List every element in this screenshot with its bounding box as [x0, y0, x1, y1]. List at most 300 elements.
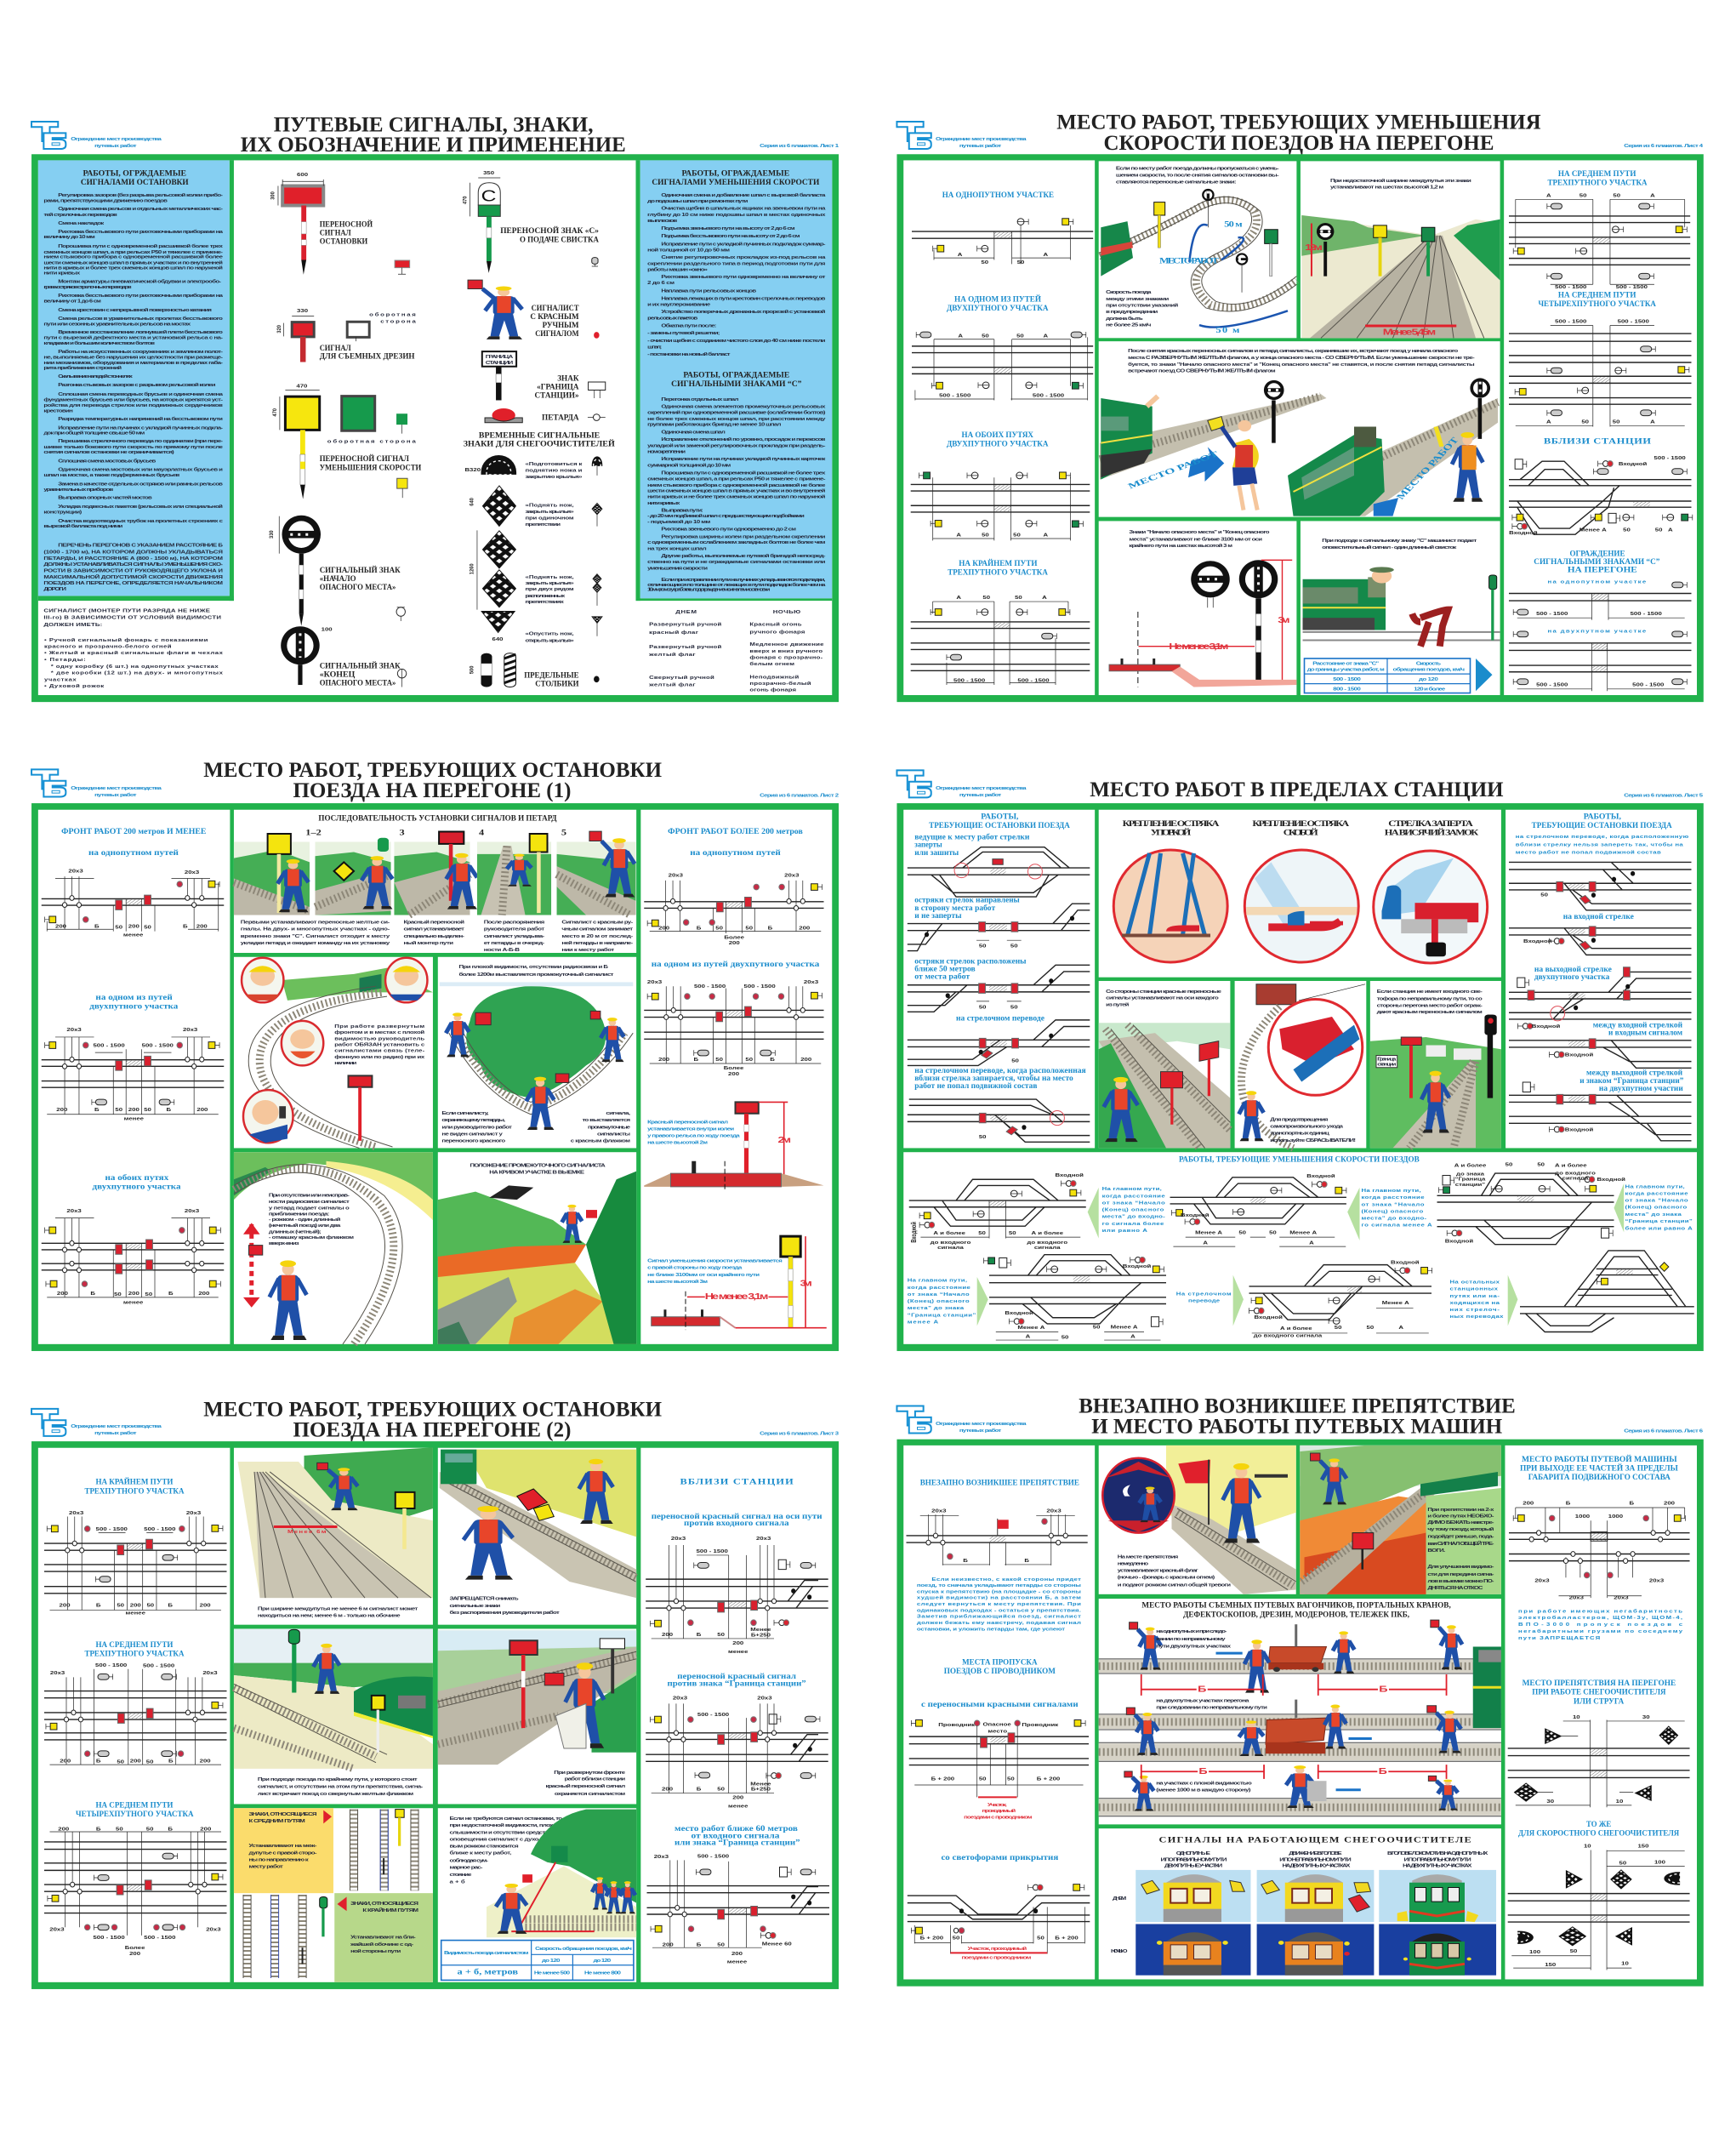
- against station limit sign: Б+250: [751, 1788, 771, 1792]
- one of two tracks diagram: А: [1043, 334, 1048, 339]
- cover signals diagram: 50: [1037, 1936, 1044, 1941]
- panel: works protected by stop signals: ройства для перевода стрелок или подвижных сердечников: [43, 402, 223, 408]
- C signs diagram: СИГНАЛЬНЫМИ ЗНАКАМИ “С”: [1534, 558, 1659, 567]
- high-speed snowplow diagram: 150: [1545, 1963, 1556, 1968]
- step 1: [234, 834, 310, 915]
- panel: works protected by stop signals: ДОРОГИ: [43, 587, 66, 592]
- one of two tracks stop diagram: 20х3: [183, 1028, 197, 1033]
- C signs diagram: НА ПЕРЕГОНЕ: [1568, 566, 1637, 574]
- diagram B: (Конец) опасного: [1361, 1209, 1423, 1214]
- diagram B: 50: [1269, 1230, 1277, 1235]
- middle of three tracks: 200: [130, 1759, 141, 1764]
- one of two tracks stop diagram: менее: [124, 1116, 144, 1121]
- obstacle diagram: [907, 1479, 1088, 1565]
- panel: signs on curve: [1099, 161, 1296, 338]
- high-speed snowplow diagram: ТО ЖЕ: [1586, 1821, 1611, 1829]
- one of two tracks long front diagram: Б: [694, 1058, 698, 1063]
- snowplow signs: закрытию крылья»: [526, 475, 583, 480]
- diagram C: станции”: [1455, 1183, 1485, 1188]
- 3 m signal placement: не ближе 3100мм от оси крайнего пути: [647, 1272, 760, 1278]
- one of two tracks long front diagram: Более: [724, 1066, 744, 1071]
- panel: snowplow signals: И ПО ПРАВИЛЬНОМУ ПУТИ: [1161, 1857, 1227, 1862]
- 3 m signal placement: [647, 1236, 827, 1330]
- diagram C: сигнала: [1562, 1177, 1589, 1181]
- panel: snowplow signals: [1099, 1828, 1501, 1979]
- panel: switch securing: КРЕПЛЕНИЕ ОСТРЯКА: [1252, 819, 1349, 828]
- panel: horn signal with table: до 120: [542, 1959, 561, 1964]
- title: И МЕСТО РАБОТЫ ПУТЕВЫХ МАШИН: [1091, 1414, 1502, 1438]
- middle of three tracks diagram: А: [1650, 193, 1655, 198]
- signalman with red flag: [468, 280, 600, 339]
- outer of three tracks diagram: 50: [1015, 596, 1022, 601]
- obstacle explanation: спуска к препятствию (на площадке - со стороны: [917, 1589, 1081, 1594]
- table: day and night signals: красный флаг: [649, 630, 698, 635]
- near station diagram: 50: [1623, 527, 1631, 533]
- panel: intermediate signalman: Если сигналисту,: [441, 1111, 489, 1115]
- logo and series label: [31, 769, 839, 798]
- scene captions: на участках с плохой видимостью: [1156, 1780, 1252, 1786]
- poster 6: sudden obstacle and track machines: [896, 1394, 1704, 1987]
- between exit switch and station limit: на двухпутном участии: [1599, 1084, 1683, 1093]
- panel: red signals on each track: [1099, 981, 1230, 1148]
- near station diagram: [1509, 437, 1693, 536]
- poster 3: stop required on a stretch (1): [31, 757, 839, 1351]
- red distance lines: [1141, 1674, 1447, 1779]
- panel: signalman equipment: • Петарды:: [44, 658, 86, 663]
- both tracks diagram: 50: [982, 533, 989, 538]
- panel: works protected by stop signals: шести смежных концов шпал в прямых участках и по внутренней: [43, 259, 223, 265]
- panel: snowplow signals: НОЧЬЮ: [1111, 1949, 1128, 1954]
- panel: whistle sign and table: Скорость: [1416, 661, 1441, 666]
- panel: works protected by stop signals: Рихтовка бесстыкового пути рихтовочными приборами на: [58, 293, 223, 299]
- panel: signs on curve: не более 25 км/ч: [1106, 322, 1151, 328]
- panel: works protected by speed reduction signals and C signs: скреплении раздельного типа в период подготовки пути для: [647, 261, 825, 266]
- panel: near station front: работ вблизи станции: [565, 1776, 625, 1782]
- near station diagram: Входной: [1619, 461, 1647, 467]
- entry switch: на входной стрелке: [1563, 912, 1634, 921]
- middle of four tracks: НА СРЕДНЕМ ПУТИ: [95, 1801, 174, 1810]
- middle of four tracks diagram: [1509, 291, 1691, 427]
- logo and series label: Серия из 6 плакатов. Лист 2: [760, 793, 839, 798]
- diagram E: 50: [1367, 1326, 1374, 1331]
- panel: red signals on each track: из путей: [1106, 1002, 1129, 1007]
- panel: works protected by stop signals: пути или сезонных уравнительных рельсов на мостах: [43, 322, 191, 327]
- against entry signal: переносной красный сигнал на оси пути: [652, 1512, 822, 1520]
- both tracks stop diagram: на обоих путях: [105, 1174, 169, 1183]
- panel: signalman equipment: III-го) В ЗАВИСИМОСТИ ОТ УСЛОВИЙ ВИДИМОСТИ: [43, 614, 221, 620]
- table: day and night signals: Красный огонь: [749, 622, 802, 627]
- panel: works protected by stop signals: ПЕРЕЧЕНЬ ПЕРЕГОНОВ С УКАЗАНИЕМ РАССТОЯНИЕ Б: [58, 543, 223, 548]
- panel: no entry signal: станции: [1377, 1062, 1396, 1067]
- panel: intermediate signalman: промежуточные: [588, 1125, 630, 1130]
- facing switches diagram: и не заперты: [914, 911, 962, 920]
- diagram C: более или равно А: [1625, 1225, 1693, 1231]
- against entry signal: менее: [728, 1650, 748, 1655]
- snowplow signs: ВРЕМЕННЫЕ СИГНАЛЬНЫЕ: [479, 431, 600, 440]
- title: МЕСТО РАБОТ, ТРЕБУЮЩИХ ОСТАНОВКИ: [203, 1397, 662, 1421]
- one of two tracks stop diagram: 20х3: [66, 1028, 82, 1033]
- diagram D: 50: [1062, 1335, 1069, 1340]
- panel: whistle sign and table: 120 и более: [1414, 687, 1445, 692]
- panel: signs on curve: МЕСТО РАБОТ: [1159, 257, 1220, 265]
- facing switches diagram: в сторону места работ: [914, 904, 996, 912]
- single-track long front diagram: 200: [658, 926, 669, 931]
- close switches diagram: ближе 50 метров: [914, 965, 976, 973]
- step 2: [316, 838, 393, 915]
- obstacle explanation: [917, 1577, 1082, 1632]
- panel: works protected by stop signals: крестовин: [43, 408, 73, 413]
- panel: intermediate signalman: сигналисты: [597, 1132, 630, 1137]
- diagram E: Менее А: [1382, 1301, 1409, 1306]
- panel: works protected by speed reduction signals and C signs: Порошивка пути с одновременной расшивкой не более трех: [661, 470, 826, 476]
- whistle sign C: 470: [463, 196, 469, 204]
- panel: installation sequence: ет петарды в очеред-: [484, 941, 544, 946]
- panel: switch securing: УПОРКОЙ: [1151, 829, 1192, 837]
- one of two tracks stop diagram: [42, 993, 224, 1121]
- snowplow obstacle diagram: 10: [1616, 1799, 1624, 1805]
- panel: signs on curve: Скорость поезда: [1106, 290, 1152, 295]
- middle of three tracks: 200: [60, 1759, 71, 1764]
- adjacent switch diagram: [908, 1066, 1090, 1142]
- middle of three tracks: 500 - 1500: [143, 1663, 174, 1668]
- panel: horn signal with table: до 120: [593, 1959, 611, 1964]
- panel: works protected by stop signals: МАКСИМАЛЬНОЙ ДОПУСТИМОЙ СКОРОСТИ ДВИЖЕНИЯ: [43, 573, 223, 579]
- danger start sign: 330: [270, 530, 275, 539]
- middle of four tracks: Б: [96, 1827, 101, 1832]
- diagram D: когда расстояние: [908, 1286, 970, 1290]
- diagram C: 50: [1537, 1162, 1545, 1167]
- one of two tracks stop diagram: 50: [144, 1108, 151, 1113]
- middle of four tracks diagram: А: [1546, 420, 1551, 425]
- panel: signals with horn and flag: - отмашку красным флажком: [269, 1235, 354, 1240]
- both tracks stop diagram: 50: [114, 1292, 122, 1297]
- near station diagram: ВБЛИЗИ СТАНЦИИ: [1544, 437, 1652, 446]
- panel: works protected by stop signals: док при общей толщине свыше 50 мм: [43, 431, 145, 436]
- station limit sign: ЗНАК: [557, 374, 579, 383]
- speed reduction signal: 470: [296, 384, 308, 389]
- panel: signalman equipment: • Желтый и красный сигнальные флаги в чехлах: [44, 650, 223, 656]
- middle of three tracks diagram: НА СРЕДНЕМ ПУТИ: [1558, 170, 1636, 179]
- panel: removable machines: МЕСТО РАБОТЫ СЪЕМНЫХ ПУТЕВЫХ ВАГОНЧИКОВ, ПОРТАЛЬНЫХ КРАНОВ,: [1141, 1601, 1451, 1610]
- panel: switch securing: НА ВИСЯЧИЙ ЗАМОК: [1385, 829, 1478, 837]
- diagram A: [909, 1172, 1165, 1251]
- against station limit sign: 20х3: [757, 1696, 772, 1701]
- panel: works protected by speed reduction signals and C signs: - замены путевой решетки;: [647, 330, 720, 336]
- panel: installation sequence: временно знаки "С". Сигналист отходит к месту: [241, 934, 390, 939]
- cover signals diagram: Участок, проходимый: [968, 1946, 1027, 1952]
- against station limit sign: [646, 1673, 828, 1809]
- panel: distance to danger signs: [1099, 521, 1296, 695]
- cover signals diagram: Б + 200: [920, 1936, 943, 1941]
- middle of three tracks diagram: 50: [1579, 193, 1587, 198]
- closer than 60 m: 20х3: [654, 1855, 669, 1860]
- panel: works protected by speed reduction signals and C signs: рельсовых пакетов: [647, 316, 697, 321]
- middle of four tracks: Б: [168, 1827, 173, 1832]
- panel: works protected by stop signals: фундаментных брусьев или брусьев, на которых крепятся уст-: [43, 396, 223, 402]
- yellow note: middle tracks: К СРЕДНИМ ПУТЯМ: [249, 1819, 305, 1824]
- panel: works protected by speed reduction signals and C signs: Регулировка ширины колеи при раздельном скреплении: [661, 534, 825, 539]
- panel: wide track spacing: находиться на нем; менее 6 м - только на обочине: [258, 1613, 401, 1618]
- station limit sign: «ГРАНИЦА: [537, 383, 579, 391]
- 3 m signal placement: Сигнал уменьшения скорости устанавливается: [647, 1258, 783, 1263]
- panel: red signals on each track: сигналы устанавливают на оси каждого: [1106, 995, 1219, 1001]
- C signs diagram: 500 - 1500: [1632, 682, 1665, 687]
- machine beyond gauge diagram: ПРИ ВЫХОДЕ ЕЕ ЧАСТЕЙ ЗА ПРЕДЕЛЫ: [1520, 1464, 1678, 1473]
- snowplow signs: препятствиях: [526, 600, 564, 605]
- panel: works protected by speed reduction signals and C signs: ственно на пути и не ограждаемые сигналами остановки или: [647, 560, 825, 565]
- panel: works protected by speed reduction signals and C signs: работы машин «окно»: [647, 266, 708, 272]
- panel: speed reduction works in station: РАБОТЫ, ТРЕБУЮЩИЕ УМЕНЬШЕНИЯ СКОРОСТИ ПОЕЗДОВ: [1179, 1155, 1420, 1164]
- single-track long front diagram: Б: [697, 926, 701, 931]
- panel: horn signal with table: оповещения сигналист с духо-: [449, 1837, 541, 1842]
- scene captions: на двухпутных участках перегона: [1156, 1698, 1249, 1703]
- snowplow signs: «Подготовиться к: [526, 462, 583, 467]
- panel: works protected by stop signals: уравнительных приборов: [43, 487, 113, 493]
- panel: works protected by speed reduction signals and C signs: суммарной толщиной до 10 мм: [647, 462, 731, 468]
- middle of four tracks: 500 - 1500: [93, 1936, 125, 1941]
- panel: works protected by stop signals: СИГНАЛАМИ ОСТАНОВКИ: [81, 179, 189, 187]
- snowplow signs: «Поднять нож,: [526, 503, 574, 508]
- diagram C: На главном пути,: [1625, 1184, 1685, 1189]
- outer of three tracks diagram: А: [1042, 596, 1047, 601]
- panel: horn signal with table: Не менее 500: [534, 1970, 570, 1976]
- detonator: [485, 408, 606, 423]
- panel: near station diagrams: [640, 1448, 832, 1982]
- against station limit sign: переносной красный сигнал: [677, 1673, 796, 1681]
- panel: left multi-track diagrams: [38, 1448, 230, 1982]
- both tracks diagram: 50: [1013, 533, 1021, 538]
- workers: [1124, 1620, 1462, 1810]
- speed reduction signal: оборотная сторона: [327, 439, 416, 444]
- panel: horn signal with table: стояние: [449, 1873, 472, 1878]
- yellow note: middle tracks: ны по направлению к: [249, 1857, 309, 1862]
- panel: works protected by stop signals: конструкции): [43, 510, 82, 515]
- panel: works protected by stop signals: Регулировка зазоров (без разрыва рельсовой колеи прибо-: [58, 192, 223, 198]
- 3 m signal placement: Не менее 3,1м: [705, 1292, 769, 1302]
- panel: switch securing: КРЕПЛЕНИЕ ОСТРЯКА: [1123, 819, 1220, 828]
- near station diagram: 500 - 1500: [1654, 456, 1686, 460]
- day column 3: [1379, 1870, 1496, 1922]
- station limit sign: СТАНЦИИ»: [535, 391, 579, 400]
- portable stop signal: 300: [270, 191, 276, 200]
- one of two tracks diagram: 500 - 1500: [939, 393, 971, 398]
- panel: signs on curve: при отсутствии указаний: [1106, 302, 1178, 308]
- panel: left station diagrams: РАБОТЫ,: [981, 813, 1019, 821]
- radio text: сигналистами связь (теле-: [334, 1048, 424, 1053]
- logo and series label: путевых работ: [94, 143, 137, 149]
- green note: outer tracks: ной стороны пути: [350, 1948, 401, 1954]
- circle: block fastening: [1113, 850, 1227, 962]
- diagram D: от знака “Начало: [908, 1292, 970, 1297]
- facing switches diagram: 50: [1010, 944, 1018, 949]
- poster 2: speed reduction on a stretch: [896, 110, 1704, 702]
- panel: works protected by stop signals: Работы на искусственных сооружениях и земляном полот-: [58, 349, 223, 355]
- panel: works protected by stop signals: нити в кривых и более трех смежных концов шпал по наружной: [43, 265, 223, 271]
- 3 m signal placement: с правой стороны по ходу поезда: [647, 1264, 743, 1270]
- single-track stop diagram: 50: [144, 925, 151, 930]
- title: ИХ ОБОЗНАЧЕНИЕ И ПРИМЕНЕНИЕ: [241, 132, 626, 157]
- one of two tracks long front diagram: 20х3: [647, 980, 662, 985]
- machine beyond gauge diagram: Б: [1629, 1501, 1634, 1506]
- scene captions: вании по неправильному: [1156, 1637, 1226, 1642]
- panel: works protected by speed reduction signals and C signs: Исправление отклонений по уровню, просадок и перекосов: [661, 436, 825, 442]
- panel: works protected by speed reduction signals and C signs: Исправление пути на пучинах укладкой пучинных карточек: [661, 456, 826, 462]
- middle of three tracks: 20х3: [50, 1671, 65, 1676]
- diagram E: А и более: [1280, 1326, 1312, 1331]
- panel: works protected by stop signals: Разрядка температурных напряжений на бесстыковом пути: [58, 416, 223, 422]
- pilot passing diagram: Б + 200: [931, 1777, 954, 1782]
- C signs diagram: на однопутном участке: [1548, 579, 1646, 584]
- panel: snowplow signals: В ГОЛОВЕ ЛОКОМОТИВ НА ОДНОПУТНЫХ: [1387, 1851, 1488, 1856]
- logo and series label: [31, 1409, 839, 1436]
- between exit switch and station limit: и знаком “Граница станции”: [1579, 1076, 1683, 1085]
- panel: snowplow signals: НА ДВУХПУТНЫХ УЧАСТКАХ: [1283, 1863, 1351, 1868]
- middle of four tracks: 20х3: [49, 1927, 65, 1932]
- panel: works protected by stop signals: Временное восстановление лопнувшей плети бесстыкового: [58, 329, 223, 335]
- C signs diagram: ОГРАЖДЕНИЕ: [1570, 550, 1625, 558]
- panel: works protected by stop signals: кладками и большим количеством болтов: [43, 340, 155, 346]
- facing switches diagram: [908, 896, 1090, 951]
- outer of three tracks: 20х3: [69, 1511, 84, 1516]
- panel: whistle sign and table: 500 - 1500: [1333, 677, 1361, 681]
- title: МЕСТО РАБОТ В ПРЕДЕЛАХ СТАНЦИИ: [1090, 777, 1504, 801]
- panel: signs on curve: ставляются переносные сигнальные знаки:: [1116, 180, 1237, 185]
- C signs diagram: [1509, 550, 1691, 691]
- panel: signalman equipment: [43, 608, 223, 689]
- panel: horn signal with table: Скорость обращения поездов, км/ч: [535, 1946, 632, 1952]
- high-speed snowplow diagram: [1508, 1821, 1690, 1970]
- logo and series label: Ограждение мест производства: [71, 1424, 162, 1429]
- panel: signalman equipment: * одну коробку (6 шт.) на однопутных участках: [51, 664, 219, 670]
- diagram D: Менее А: [1111, 1325, 1138, 1330]
- obstacle explanation: следует вернуться к месту препятствия. При: [917, 1602, 1081, 1607]
- panel: signalmen meeting train: МЕСТО РАБОТ: [1394, 436, 1461, 501]
- title: ВНЕЗАПНО ВОЗНИКШЕЕ ПРЕПЯТСТВИЕ: [1079, 1394, 1516, 1417]
- high-speed snowplow diagram: ДЛЯ СКОРОСТНОГО СНЕГООЧИСТИТЕЛЯ: [1518, 1829, 1679, 1838]
- closer than 60 m: от входного сигнала: [692, 1832, 780, 1840]
- night column 2: [1257, 1924, 1374, 1976]
- panel: left station diagrams: [903, 810, 1095, 1148]
- table: day and night signals: Развернутый ручной: [649, 644, 721, 650]
- panel: works protected by speed reduction signals and C signs: - очистки щебня с созданием чистого слоя до 40 см ниже постели: [647, 338, 825, 344]
- closer than 60 m: Менее 60: [762, 1942, 792, 1947]
- panel: intermediate signalman: При плохой видимости, отсутствии радиосвязи и Б: [459, 964, 608, 970]
- middle of three tracks diagram: 50: [1613, 193, 1620, 198]
- panel: intermediate signalman: не виден сигналист у: [441, 1132, 503, 1137]
- panel: installation sequence: Красный переносной: [404, 920, 464, 925]
- locked switches diagram: или зашиты: [914, 848, 959, 857]
- panel: snowplow signals: ДВУХПУТНЫЕ УЧАСТКИ: [1164, 1863, 1222, 1868]
- poster 1: track signals and signs: [31, 112, 839, 702]
- panel: works protected by stop signals: шивке только бокового пути скорость по прямому пути после: [43, 444, 223, 450]
- panel: running to train: вая СИГНАЛ ОБЩЕЙ ТРЕ-: [1427, 1540, 1494, 1547]
- panel: works protected by stop signals: Скалывание наледей с тоннелях: [58, 373, 133, 379]
- day column 1: [1136, 1870, 1250, 1922]
- panel: works protected by speed reduction signals and C signs: смежных концов шпал, а при рельсах Р50 и тяжелее с примене-: [647, 476, 825, 482]
- title: [203, 1397, 662, 1441]
- panel: no entry signal: [1370, 981, 1501, 1148]
- panel: installation sequence: сигнал устанавливает: [404, 927, 465, 932]
- single-track stop diagram: Б: [183, 924, 188, 929]
- middle of four tracks: 200: [58, 1827, 69, 1832]
- panel: works protected by speed reduction signals and C signs: глубину до 10 см ниже подошвы шпал в местах одиночных: [647, 212, 826, 218]
- middle of three tracks: 20х3: [202, 1671, 218, 1676]
- panel: flag at obstacle: немедленно: [1118, 1561, 1148, 1566]
- both tracks stop diagram: 20х3: [185, 1209, 199, 1214]
- one of two tracks long front diagram: 50: [745, 1058, 753, 1063]
- panel: signs between tracks: устанавливают на шестах высотой 1,2 м: [1330, 184, 1443, 190]
- panel: curve in cutting: НА КРИВОМ УЧАСТКЕ В ВЫЕМКЕ: [489, 1170, 585, 1175]
- panel: works protected by stop signals: Монтаж арматуры пневматической обдувки и электрообо-: [58, 278, 221, 284]
- panel: works protected by speed reduction signals and C signs: Перегонка отдельных шпал: [661, 397, 738, 402]
- diagram A: до входного: [1027, 1240, 1067, 1245]
- single-track long front diagram: 50: [745, 926, 753, 931]
- panel: works protected by stop signals: Сплошная смена переводных брусьев и одиночная смена: [58, 391, 223, 397]
- panel: flag at obstacle: (ночью - фонарь с красным огнем): [1118, 1575, 1215, 1580]
- adjacent switch diagram: работ не попал подвижной состав: [914, 1082, 1038, 1091]
- outer of three tracks: 200: [130, 1603, 141, 1608]
- panel: do not remove signs: без распоряжения руководителя работ: [449, 1610, 561, 1616]
- panel: signalman equipment: • Духовой рожок: [44, 683, 105, 689]
- high-speed snowplow diagram: 50: [1619, 1861, 1626, 1866]
- panel: works protected by stop signals: Очистка водоотводных трубок на пролетных строениях с: [58, 518, 223, 524]
- logo and series label: путевых работ: [959, 792, 1002, 798]
- red distance lines: Б: [1198, 1684, 1206, 1694]
- diagram C: “Граница станции”: [1625, 1219, 1693, 1224]
- both tracks stop diagram: 200: [198, 1292, 210, 1297]
- single-track stop diagram: 50: [115, 925, 122, 930]
- panel: horn signal with table: Видимость поезда сигналистом: [444, 1951, 528, 1956]
- panel: snowplow signals: СИГНАЛЫ НА РАБОТАЮЩЕМ СНЕГООЧИСТИТЕЛЕ: [1159, 1836, 1471, 1845]
- diagram D: Входной: [1123, 1263, 1151, 1269]
- panel: whistle sign and table: Расстояние от знака "С": [1312, 661, 1379, 666]
- panel: center signals: [270, 171, 615, 688]
- panel: curve in cutting: [438, 1152, 636, 1344]
- middle of three tracks: Б: [96, 1759, 101, 1764]
- both tracks stop diagram: [42, 1174, 224, 1305]
- panel: no entry signal: дают красным переносным сигналом: [1377, 1010, 1483, 1015]
- middle of four tracks diagram: 50: [1613, 420, 1620, 425]
- logo and series label: Ограждение мест производства: [71, 786, 162, 791]
- pilot passing diagram: 50: [1007, 1777, 1015, 1782]
- diagram A: когда расстояние: [1102, 1194, 1165, 1199]
- against station limit sign: 20х3: [673, 1696, 687, 1701]
- diagram E: переводе: [1188, 1298, 1220, 1303]
- panel: signs on curve: в предупреждении: [1106, 310, 1158, 315]
- whistle sign C: О ПОДАЧЕ СВИСТКА: [520, 236, 599, 244]
- panel: signals with horn and flag: приближении поезда:: [269, 1211, 329, 1217]
- near station diagram: 50: [1655, 527, 1663, 533]
- table: day and night signals: огонь фонаря: [749, 688, 796, 693]
- panel: installation sequence: чным сигналом занимает: [561, 927, 634, 932]
- diagram C: до знака: [1456, 1172, 1484, 1177]
- cover signals diagram: Б + 200: [1055, 1936, 1079, 1941]
- oversized text: ВПО-3000 пропуск поездов с: [1518, 1622, 1682, 1628]
- panel: running to train: [1300, 1445, 1501, 1594]
- high-speed snowplow diagram: 10: [1621, 1961, 1629, 1966]
- panel: do not remove signs: сигнальные знаки: [449, 1604, 500, 1609]
- adjacent switch cannot be locked: [1509, 835, 1691, 910]
- whistle sign C: 350: [483, 171, 494, 176]
- panel: signs on curve: Если по месту работ поезда должны пропускаться с умень-: [1116, 165, 1279, 171]
- C signs diagram: 500 - 1500: [1536, 612, 1568, 617]
- diagram F: станционных: [1449, 1287, 1498, 1292]
- panel: running to train: При препятствии на 2-х: [1427, 1508, 1494, 1513]
- day column 2: [1257, 1870, 1374, 1922]
- outer of three tracks: Б: [96, 1603, 101, 1608]
- station limit sign: СТАНЦИИ: [486, 361, 513, 366]
- single-track stop diagram: 200: [128, 924, 139, 929]
